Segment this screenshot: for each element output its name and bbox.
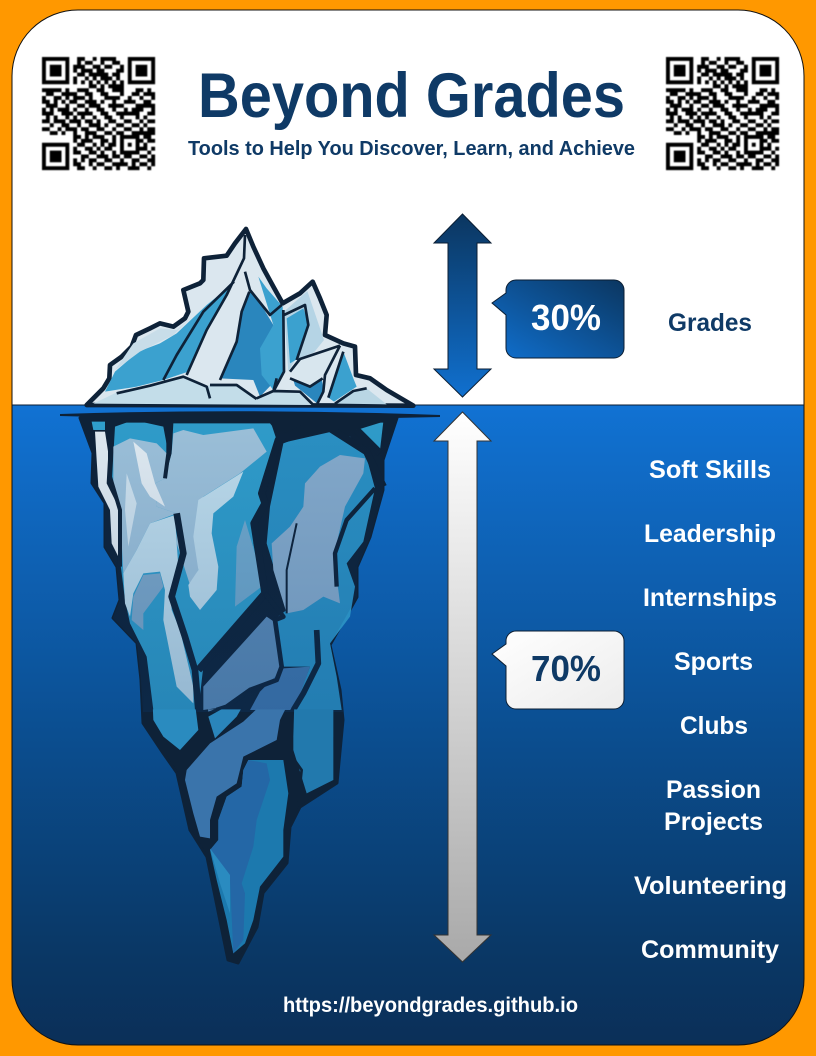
item: Internships: Internships bbox=[643, 584, 777, 612]
top left facet bbox=[92, 422, 105, 430]
left pale bbox=[123, 515, 193, 703]
lower right pale facet bbox=[292, 346, 340, 385]
berg silhouette bbox=[87, 229, 413, 406]
large gray piece bbox=[185, 710, 285, 838]
callout: 30 percent bbox=[492, 280, 624, 358]
right facet blue bbox=[287, 308, 309, 363]
item: Passion Projects: Passion bbox=[666, 776, 761, 804]
item: Passion Projects bbox=[664, 776, 763, 836]
icon: QR code left bbox=[42, 59, 155, 168]
central mid face bbox=[258, 277, 284, 390]
white strip bbox=[95, 432, 120, 560]
main block bbox=[112, 420, 278, 710]
lower center right bbox=[250, 667, 310, 710]
mid gray piece bbox=[208, 709, 215, 712]
berg silhouette bbox=[80, 418, 397, 963]
item: Soft Skills: Soft Skills bbox=[649, 456, 771, 484]
arrow: 30 percent range bbox=[434, 214, 491, 397]
footer URL: https://beyondgrades.github.io bbox=[283, 994, 578, 1017]
arrow: 70 percent range bbox=[434, 412, 491, 962]
central dark face bbox=[220, 292, 281, 397]
item: Sports: Sports bbox=[674, 648, 753, 676]
list: below-surface items bbox=[634, 456, 787, 964]
cracks bbox=[172, 513, 198, 710]
base snow bbox=[93, 377, 313, 405]
small piece bbox=[208, 709, 241, 738]
item: Clubs: Clubs bbox=[680, 712, 748, 740]
gray-blue left bbox=[113, 438, 177, 573]
lower dark facet bbox=[293, 378, 324, 404]
iceberg above water bbox=[87, 229, 413, 406]
base snow right bbox=[337, 388, 387, 404]
depth shading bbox=[80, 418, 397, 712]
right facet bbox=[284, 291, 324, 372]
water surface line bbox=[60, 411, 440, 419]
lower center face bbox=[203, 617, 282, 710]
item: Volunteering: Volunteering bbox=[634, 872, 787, 900]
lower inner shade bbox=[210, 760, 270, 953]
item: Community: Community bbox=[641, 936, 779, 964]
right piece bbox=[293, 709, 334, 794]
iceberg below water bbox=[80, 418, 397, 963]
large lower piece bbox=[210, 760, 288, 953]
top right facet bbox=[357, 422, 383, 450]
item: Passion Projects: Projects bbox=[664, 808, 763, 836]
dark rib bbox=[296, 760, 303, 779]
subtitle: Tools to Help You Discover, Learn, and Achieve bbox=[188, 138, 635, 160]
left gray bbox=[132, 573, 163, 630]
item: Leadership: Leadership bbox=[644, 520, 776, 548]
gray-blue center bbox=[155, 428, 267, 585]
left blue face bbox=[105, 283, 233, 392]
left piece bbox=[152, 709, 198, 750]
label: Grades: Grades bbox=[668, 309, 752, 337]
callout: 70 percent: 70% bbox=[531, 648, 601, 689]
bright sliver bbox=[210, 848, 230, 913]
icon: QR code right bbox=[666, 59, 779, 168]
callout: 30 percent: 30% bbox=[531, 297, 601, 338]
right gray-blue bbox=[272, 455, 365, 613]
right block bbox=[267, 428, 375, 710]
title: Beyond Grades bbox=[198, 61, 625, 131]
light highlight bbox=[133, 442, 165, 507]
crack lines bbox=[117, 235, 367, 405]
callout: 70 percent bbox=[492, 631, 624, 709]
pale shading left bbox=[115, 318, 190, 370]
light highlight small bbox=[125, 473, 137, 547]
center pale bbox=[188, 472, 243, 610]
right blue facet bbox=[328, 352, 357, 402]
center ghost bbox=[235, 520, 262, 607]
